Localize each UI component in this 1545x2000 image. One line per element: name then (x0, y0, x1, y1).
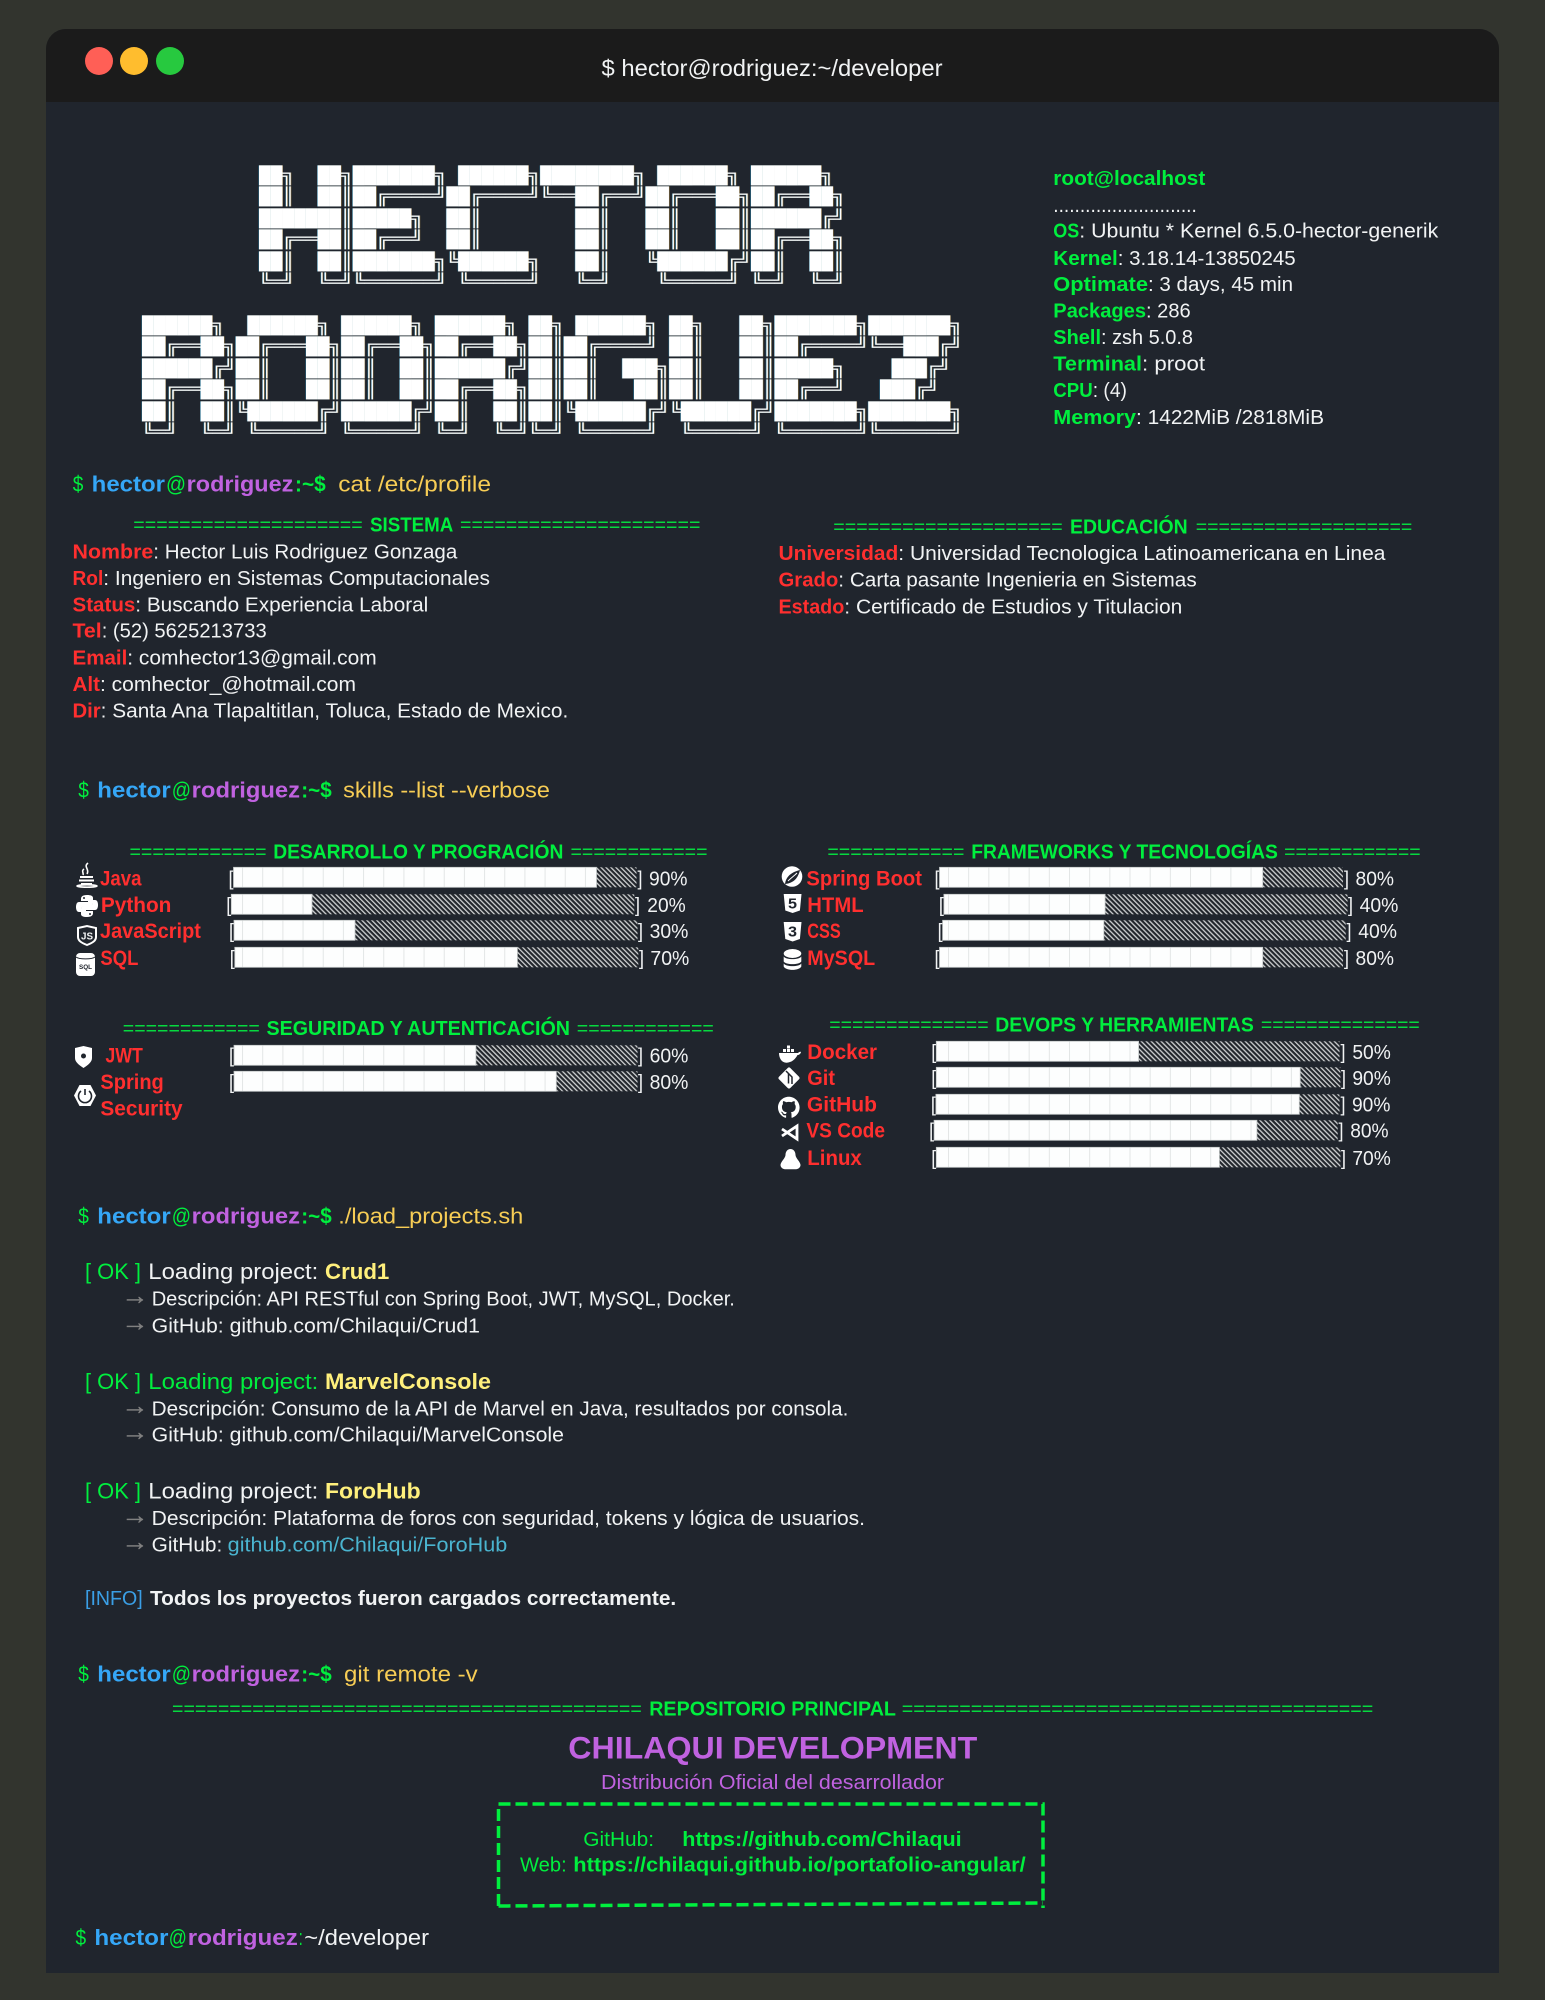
icon: git (778, 1067, 800, 1089)
panel: sistema: ==================== (133, 514, 363, 537)
skill: javascript: ] (638, 920, 643, 943)
project: forohub (85, 1478, 865, 1557)
skill: spring security: 80% (650, 1071, 688, 1094)
skill: linux: Linux (807, 1147, 862, 1170)
panel: sistema: Status (72, 594, 135, 617)
skill: git (807, 1067, 1391, 1090)
title bar (46, 29, 1499, 102)
panel: seguridad y autenticacion (74, 1016, 714, 1121)
skill: sql: [ (230, 947, 235, 970)
project: marvelconsole: GitHub: github.com/Chilaqui/MarvelConsole (152, 1424, 564, 1447)
skill: python: 20% (647, 894, 686, 917)
panel: educacion: : Carta pasante Ingenieria en Sistemas (838, 569, 1197, 592)
heading: ============== (1261, 1014, 1420, 1037)
skill: java (100, 867, 688, 890)
ascii banner: RODRIGUEZ: ██████╗ ██████╗ ██████╗ ██████╗ ██╗ ██████╗ ██╗ ██╗███████╗███████╗ ██╔══██╗██╔═══██╗██╔══██╗██╔══██╗██║██╔════╝ ██║ ██║██╔════╝╚══███╔╝ ██████╔╝██║ ██║██║ ██║██████╔╝██║██║ ███╗██║ ██║█████╗ ███╔╝ ██╔══██╗██║ ██║██║ ██║██╔══██╗██║██║ ██║██║ ██║██╔══╝ ███╔╝ ██║ ██║╚██████╔╝██████╔╝██║ ██║██║╚██████╔╝╚██████╔╝███████╗███████╗ ╚═╝ ╚═╝ ╚═════╝ ╚═════╝ ╚═╝ ╚═╝╚═╝ ╚═════╝ ╚═════╝ ╚══════╝╚══════╝ (142, 316, 962, 443)
prompt: skills: @ (172, 778, 191, 803)
panel: sistema: : Hector Luis Rodriguez Gonzaga (153, 540, 458, 563)
skill: mysql (807, 947, 1394, 970)
icon: css3: 3 (788, 924, 797, 940)
ascii banner: HECTOR: ██╗ ██╗███████╗ ██████╗████████╗ ██████╗ ██████╗ ██║ ██║██╔════╝██╔════╝╚══██╔══╝██╔═══██╗██╔══██╗ ███████║█████╗ ██║ ██║ ██║ ██║██████╔╝ ██╔══██║██╔══╝ ██║ ██║ ██║ ██║██╔══██╗ ██║ ██║███████╗╚██████╗ ██║ ╚██████╔╝██║ ██║ ╚═╝ ╚═╝╚══════╝ ╚═════╝ ╚═╝ ╚═════╝ ╚═╝ ╚═╝ (259, 166, 845, 293)
skill: java: Java (100, 867, 142, 890)
project: crud1 (85, 1259, 735, 1337)
system info panel: OS (1053, 220, 1079, 243)
skill: jwt: 60% (650, 1045, 688, 1068)
final prompt: hector (94, 1925, 169, 1950)
repository heading: REPOSITORIO PRINCIPAL (649, 1698, 896, 1721)
title bar: $ hector@rodriguez:~/developer (602, 55, 943, 81)
system info panel: Shell (1053, 326, 1101, 349)
panel: educacion: Estado (778, 595, 844, 618)
prompt: cat /etc/profile (73, 472, 491, 497)
icon: python (76, 895, 98, 917)
repository heading (172, 1698, 1373, 1721)
heading (829, 1014, 1420, 1037)
skill: html: HTML (807, 894, 864, 917)
icon: sql: SQL (79, 964, 92, 971)
skill: github: 90% (1352, 1094, 1390, 1117)
system info panel: Terminal (1053, 353, 1142, 376)
skill: vs code: VS Code (806, 1120, 885, 1143)
skill: spring security: [ (229, 1071, 234, 1094)
panel: sistema: Email (72, 646, 127, 669)
panel: sistema (72, 514, 700, 723)
prompt: skills: hector (97, 778, 171, 803)
skill: css: 40% (1358, 920, 1397, 943)
skill: docker (807, 1041, 1391, 1064)
skill: mysql: [ (934, 947, 940, 970)
system info panel: : (4) (1093, 379, 1127, 402)
system info panel: Packages (1053, 300, 1146, 323)
project: forohub: → (122, 1501, 148, 1529)
prompt: skills: $ (78, 778, 89, 803)
system info panel: : Ubuntu * Kernel 6.5.0-hector-generik (1079, 220, 1439, 243)
project: crud1: Loading project: (148, 1259, 318, 1284)
panel: educacion: EDUCACIÓN (1070, 514, 1188, 538)
icon: sql (76, 953, 95, 976)
prompt: load projects (78, 1203, 523, 1228)
prompt: git remote (78, 1662, 478, 1687)
info message: [INFO] (85, 1587, 143, 1610)
prompt: load projects: $ (78, 1203, 89, 1228)
prompt: git remote: rodriguez (192, 1662, 300, 1687)
icon: java (77, 863, 97, 887)
skill: javascript: 30% (650, 920, 688, 943)
system info panel: Optimate (1053, 273, 1148, 296)
skill: linux: ] (1341, 1147, 1346, 1170)
system info panel: : zsh 5.0.8 (1101, 326, 1193, 349)
final prompt: rodriguez (188, 1925, 298, 1950)
skill: linux: [ (931, 1147, 937, 1170)
heading (123, 1016, 714, 1040)
panel: educacion (778, 514, 1412, 618)
skill: vs code: [ (929, 1120, 934, 1143)
prompt: cat /etc/profile: :~$ (295, 472, 326, 497)
final prompt (76, 1925, 430, 1950)
skill: github: GitHub (807, 1094, 877, 1117)
panel: sistema: : (52) 5625213733 (102, 620, 267, 643)
panel: sistema: ===================== (460, 514, 700, 537)
prompt: load projects: :~$ (301, 1203, 332, 1228)
skill: java: ] (638, 867, 642, 890)
icon: linux (780, 1149, 800, 1169)
skill: linux (807, 1147, 1391, 1170)
panel: sistema: Dir (72, 700, 101, 723)
panel: sistema: SISTEMA (370, 514, 453, 537)
project: marvelconsole: [ OK ] (85, 1369, 141, 1394)
project: marvelconsole: Descripción: Consumo de la API de Marvel en Java, resultados por consola. (152, 1398, 848, 1421)
panel: sistema: Alt (72, 673, 100, 696)
skill: git: ] (1341, 1067, 1346, 1090)
system info panel: : 3 days, 45 min (1148, 273, 1293, 296)
skill: java: [ (228, 867, 234, 890)
system info panel (1053, 167, 1439, 429)
project: marvelconsole: → (122, 1418, 148, 1446)
panel: devops y herramientas (778, 1014, 1420, 1170)
skill: github: ] (1340, 1094, 1346, 1117)
system info panel: : 286 (1146, 300, 1191, 323)
panel: sistema: Nombre (72, 540, 153, 563)
project: forohub: GitHub: (152, 1534, 222, 1557)
dashed link box: Web: (520, 1854, 567, 1877)
heading: ============ (577, 1017, 714, 1040)
project: forohub: github.com/Chilaqui/ForoHub (228, 1534, 507, 1557)
skill: python: ] (635, 894, 640, 917)
icon: vs code (782, 1126, 797, 1139)
project: forohub: Descripción: Plataforma de foros con seguridad, tokens y lógica de usuarios. (152, 1507, 865, 1530)
heading: SEGURIDAD Y AUTENTICACIÓN (266, 1016, 570, 1040)
final prompt: $ (76, 1925, 87, 1950)
prompt: cat /etc/profile: hector (92, 472, 165, 497)
skill: javascript: [ (229, 920, 234, 943)
icon: github (778, 1097, 800, 1118)
skill: jwt (105, 1045, 688, 1068)
prompt: git remote: $ (78, 1662, 89, 1687)
project: crud1: Descripción: API RESTful con Spring Boot, JWT, MySQL, Docker. (152, 1288, 735, 1311)
system info panel: CPU (1053, 379, 1093, 402)
heading: FRAMEWORKS Y TECNOLOGÍAS (971, 840, 1278, 863)
icon: css3 (784, 922, 802, 942)
repository subtitle: Distribución Oficial del desarrollador (601, 1771, 944, 1794)
system info panel: : 3.18.14-13850245 (1118, 247, 1296, 270)
skill: spring boot: ] (1344, 867, 1349, 890)
skill: spring boot: Spring Boot (806, 867, 922, 890)
final prompt: : (299, 1925, 303, 1950)
icon: html5: 5 (788, 896, 797, 912)
system info panel: root@localhost (1053, 167, 1205, 190)
icon: docker (779, 1046, 801, 1063)
dashed link box: https://github.com/Chilaqui (682, 1828, 962, 1851)
project: crud1: [ OK ] (85, 1259, 141, 1284)
skill: spring security: Spring (100, 1071, 164, 1094)
panel: sistema: : comhector_@hotmail.com (100, 673, 356, 696)
system info panel: Memory (1053, 406, 1137, 429)
skill: vs code: 80% (1350, 1120, 1389, 1143)
project: crud1: GitHub: github.com/Chilaqui/Crud1 (152, 1314, 480, 1337)
icon: mysql database (784, 949, 801, 970)
project: marvelconsole: MarvelConsole (325, 1369, 491, 1394)
skill: java: 90% (649, 867, 688, 890)
system info panel: ........................... (1053, 194, 1197, 217)
prompt: cat /etc/profile: @ (166, 472, 186, 497)
panel: educacion: Universidad (778, 542, 898, 565)
skill: vs code: ] (1338, 1120, 1344, 1143)
project: forohub: [ OK ] (85, 1478, 141, 1503)
skill: linux: 70% (1352, 1147, 1391, 1170)
panel: educacion: : Certificado de Estudios y Titulacion (844, 595, 1182, 618)
skill: github: [ (931, 1094, 936, 1117)
heading: DESARROLLO Y PROGRACIÓN (273, 839, 563, 863)
prompt: load projects: @ (172, 1203, 191, 1228)
prompt: skills: rodriguez (192, 778, 300, 803)
dashed link box: GitHub: (583, 1828, 654, 1851)
heading (827, 840, 1421, 863)
final prompt: @ (169, 1925, 187, 1950)
panel: desarrollo y programacion (76, 839, 708, 976)
heading: ============ (123, 1017, 260, 1040)
project: crud1: → (122, 1309, 148, 1337)
skill: sql: ] (639, 947, 644, 970)
skill: git: [ (931, 1067, 937, 1090)
skill: html: ] (1348, 894, 1353, 917)
prompt: skills: skills --list --verbose (343, 778, 550, 803)
prompt: cat /etc/profile: $ (73, 472, 84, 497)
icon: html5 (784, 894, 802, 913)
panel: educacion: : Universidad Tecnologica Latinoamericana en Linea (898, 542, 1386, 565)
icon: javascript shield: JS (81, 932, 93, 942)
skill: docker: [ (931, 1041, 937, 1064)
skill: docker: Docker (807, 1041, 877, 1064)
panel: frameworks y tecnologias (782, 840, 1421, 970)
prompt: git remote: :~$ (301, 1662, 332, 1687)
skill: spring boot (806, 867, 1394, 890)
panel: sistema: Tel (72, 620, 102, 643)
heading: ============== (829, 1014, 989, 1037)
project: marvelconsole: Loading project: (148, 1369, 318, 1394)
prompt: git remote: hector (97, 1662, 171, 1687)
skill: mysql: MySQL (807, 947, 875, 970)
skill: sql: 70% (650, 947, 689, 970)
system info panel: Kernel (1053, 247, 1118, 270)
prompt: git remote: @ (172, 1662, 191, 1687)
project: crud1: Crud1 (325, 1259, 389, 1284)
skill: mysql: 80% (1356, 947, 1394, 970)
panel: sistema: : Ingeniero en Sistemas Computacionales (103, 567, 490, 590)
icon: javascript shield (78, 926, 96, 945)
skill: jwt: JWT (105, 1045, 143, 1068)
heading: ============ (827, 840, 964, 863)
panel: educacion: ==================== (833, 515, 1063, 538)
skill: sql: SQL (100, 947, 139, 970)
heading: DEVOPS Y HERRAMIENTAS (995, 1014, 1254, 1037)
system info panel: : proot (1142, 353, 1205, 376)
skill: git: Git (807, 1067, 835, 1090)
info message: Todos los proyectos fueron cargados correctamente. (150, 1587, 676, 1610)
skill: sql (100, 947, 689, 970)
repository title: CHILAQUI DEVELOPMENT (568, 1729, 977, 1765)
icon: spring security (74, 1085, 96, 1106)
skill: python: Python (101, 894, 171, 917)
repository heading: ========================================= (172, 1698, 642, 1721)
project: forohub: → (122, 1528, 148, 1556)
dashed link box: https://chilaqui.github.io/portafolio-angular/ (573, 1854, 1026, 1877)
skill: docker: ] (1340, 1041, 1346, 1064)
skill: css: CSS (807, 920, 841, 943)
prompt: skills: :~$ (301, 778, 332, 803)
repository heading: ========================================= (902, 1698, 1373, 1721)
icon: spring boot (782, 866, 802, 887)
prompt: cat /etc/profile: rodriguez (187, 472, 293, 497)
prompt: load projects: hector (97, 1203, 171, 1228)
skill: vs code (806, 1120, 1389, 1143)
skill: github (807, 1094, 1390, 1117)
skill: git: 90% (1352, 1067, 1391, 1090)
skill: spring security (100, 1071, 688, 1121)
heading: ============ (1284, 840, 1421, 863)
skill: jwt: ] (638, 1045, 643, 1068)
panel: sistema: Rol (72, 567, 103, 590)
system info panel: : 1422MiB /2818MiB (1136, 406, 1324, 429)
panel: educacion: =================== (1196, 515, 1412, 538)
prompt: git remote: git remote -v (344, 1662, 478, 1687)
panel: sistema: : Santa Ana Tlapaltitlan, Toluca, Estado de Mexico. (101, 700, 568, 723)
prompt: load projects: ./load_projects.sh (338, 1203, 523, 1228)
skill: spring security: Security (100, 1098, 183, 1121)
panel: sistema: : comhector13@gmail.com (127, 646, 377, 669)
final prompt: ~/developer (304, 1925, 430, 1950)
skill: spring boot: [ (934, 867, 940, 890)
prompt: load projects: rodriguez (192, 1203, 300, 1228)
skill: spring boot: 80% (1356, 867, 1394, 890)
skill: docker: 50% (1352, 1041, 1391, 1064)
heading (130, 839, 708, 863)
project: forohub: Loading project: (148, 1478, 318, 1503)
skill: jwt: [ (229, 1045, 234, 1068)
icon: jwt shield (75, 1046, 92, 1068)
skill: javascript (100, 920, 688, 943)
skill: mysql: ] (1344, 947, 1349, 970)
prompt: skills (78, 778, 550, 803)
project: crud1: → (122, 1282, 148, 1310)
skill: css: [ (938, 920, 943, 943)
skill: python (101, 894, 686, 917)
project: marvelconsole: → (122, 1392, 148, 1420)
skill: css (807, 920, 1397, 943)
skill: spring security: ] (638, 1071, 643, 1094)
prompt: cat /etc/profile: cat /etc/profile (338, 472, 491, 497)
skill: html: [ (939, 894, 944, 917)
project: marvelconsole (85, 1369, 848, 1447)
dashed link box (498, 1804, 1043, 1908)
panel: sistema: : Buscando Experiencia Laboral (135, 594, 428, 617)
skill: html: 40% (1360, 894, 1398, 917)
skill: css: ] (1346, 920, 1352, 943)
heading: ============ (130, 840, 266, 863)
heading: ============ (570, 840, 708, 863)
skill: javascript: JavaScript (100, 920, 201, 943)
skill: python: [ (226, 894, 232, 917)
panel: educacion: Grado (778, 569, 838, 592)
skill: html (807, 894, 1398, 917)
project: forohub: ForoHub (325, 1478, 421, 1503)
